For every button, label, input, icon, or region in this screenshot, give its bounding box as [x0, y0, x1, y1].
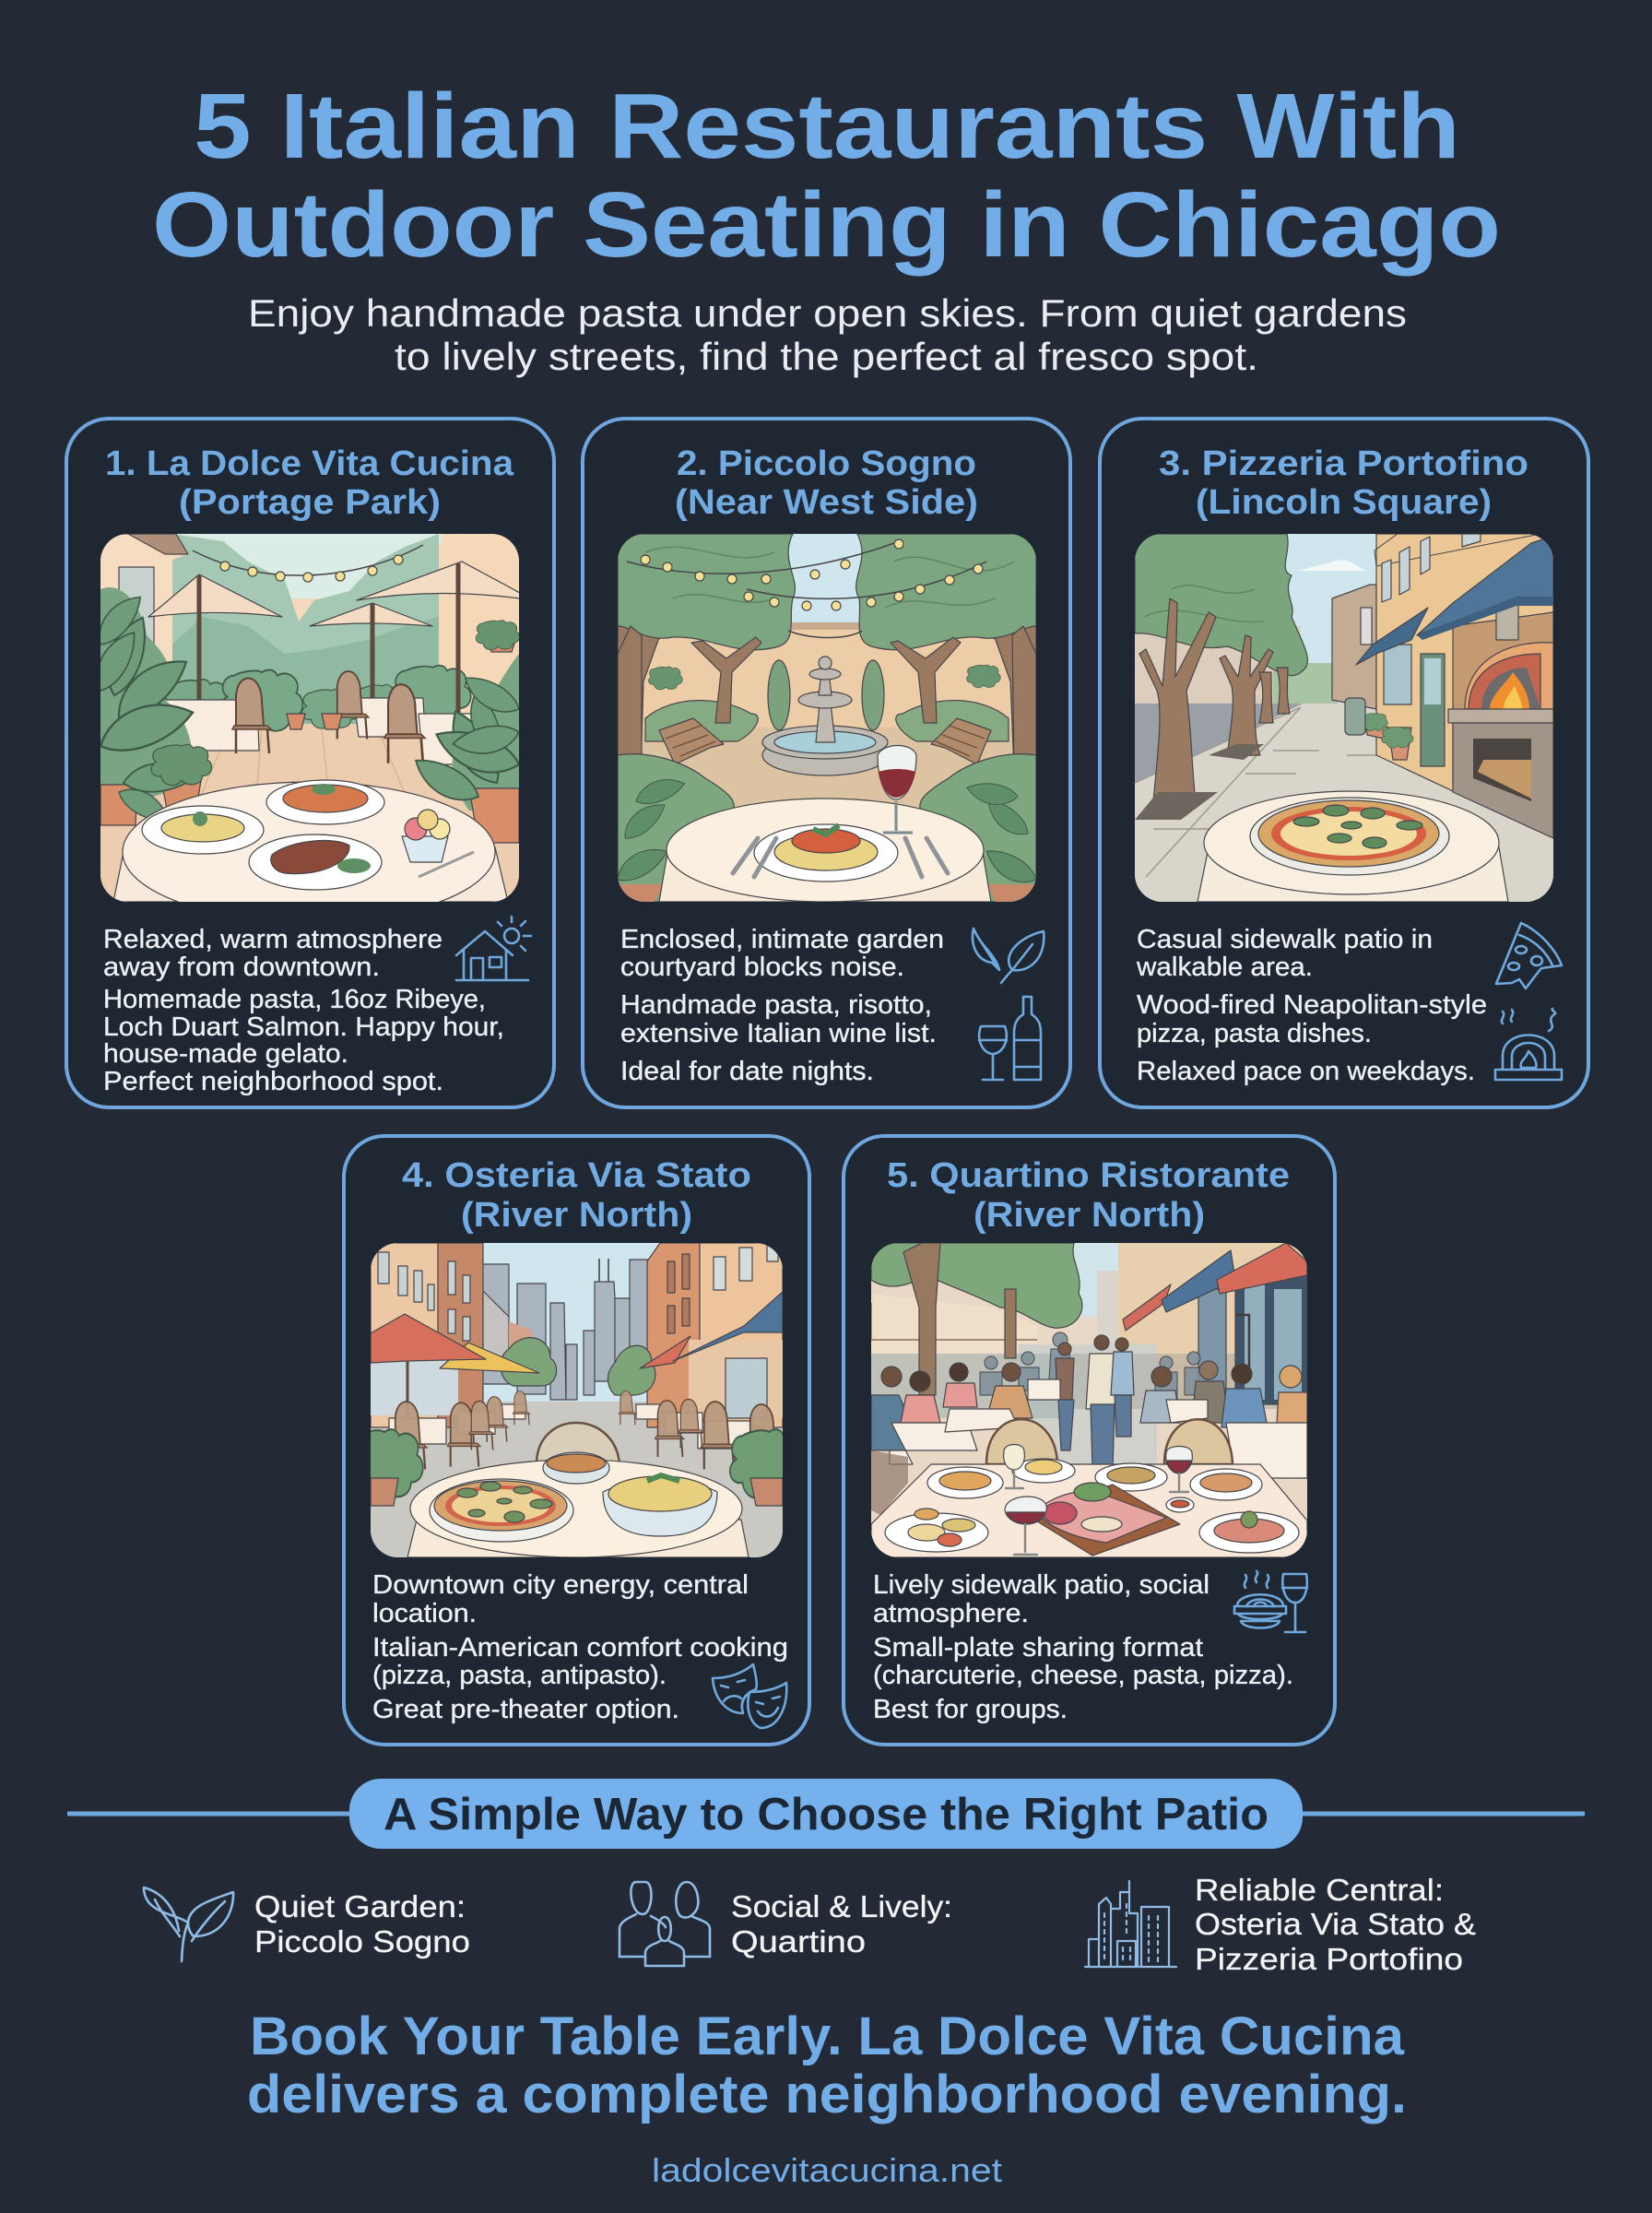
illustration: lively sidewalk patio with sharing plates — [871, 1243, 1307, 1557]
icon: house with sun — [456, 917, 531, 980]
heading: restaurant 5: 5. Quartino Ristorante — [887, 1156, 1290, 1195]
text block: restaurant 4 — [372, 1570, 788, 1724]
text block: restaurant 3: Relaxed pace on weekdays. — [1137, 1057, 1475, 1086]
text block: restaurant 4: Italian-American comfort cooking — [372, 1633, 788, 1663]
title — [152, 75, 1501, 277]
text block: restaurant 5: Small-plate sharing format — [873, 1633, 1203, 1663]
website url: ladolcevitacucina.net — [652, 2151, 1002, 2189]
panel: Pizzeria Portofino — [1100, 419, 1588, 1107]
section header: choose the right patio — [67, 1779, 1585, 1849]
title: Outdoor Seating in Chicago — [152, 173, 1501, 277]
illustration: downtown street with skyline — [371, 1243, 783, 1557]
illustration: garden courtyard with fountain — [611, 534, 1041, 902]
text block: restaurant 5: atmosphere. — [873, 1599, 1029, 1628]
text block: restaurant 3: pizza, pasta dishes. — [1137, 1019, 1372, 1048]
icon: city skyline — [1085, 1881, 1176, 1967]
icon: wine glass and bottle — [979, 997, 1041, 1080]
text block: restaurant 2: courtyard blocks noise. — [620, 953, 904, 982]
heading: restaurant 4: 4. Osteria Via Stato — [402, 1156, 751, 1195]
text block: restaurant 5: Lively sidewalk patio, social — [873, 1570, 1210, 1600]
icon: leaves — [973, 929, 1044, 983]
text block: restaurant 4: (pizza, pasta, antipasto). — [372, 1661, 667, 1690]
text block: restaurant 4: Downtown city energy, central — [372, 1570, 749, 1600]
icon: leaf — [144, 1888, 233, 1961]
text block: restaurant 1: house-made gelato. — [103, 1039, 348, 1069]
text block: restaurant 4: Great pre-theater option. — [372, 1695, 679, 1724]
subtitle: Enjoy handmade pasta under open skies. From quiet gardens — [248, 291, 1407, 335]
text block: restaurant 2: Ideal for date nights. — [620, 1057, 874, 1086]
illustration: garden patio with pasta, steak and gelato — [100, 534, 519, 902]
heading: restaurant 4: (River North) — [461, 1196, 692, 1235]
foreground table with pasta — [659, 799, 991, 902]
legend item: social and lively: Quartino — [731, 1924, 866, 1959]
heading: restaurant 4 — [402, 1156, 751, 1235]
text block: restaurant 3: walkable area. — [1136, 953, 1313, 982]
text block: restaurant 3: Wood-fired Neapolitan-style — [1137, 990, 1487, 1020]
call to action: delivers a complete neighborhood evening. — [247, 2065, 1407, 2124]
panel: La Dolce Vita Cucina — [66, 419, 554, 1107]
section header: choose the right patio: A Simple Way to Choose the Right Patio — [384, 1790, 1268, 1840]
foreground table with pizza and pasta — [407, 1452, 749, 1557]
legend item: reliable central — [1085, 1873, 1476, 1976]
legend item: reliable central: Pizzeria Portofino — [1195, 1942, 1463, 1976]
text block: restaurant 3 — [1136, 925, 1487, 1086]
text block: restaurant 1: Perfect neighborhood spot. — [103, 1067, 443, 1096]
heading: restaurant 5: (River North) — [974, 1196, 1205, 1235]
text block: restaurant 5: Best for groups. — [873, 1695, 1068, 1724]
heading: restaurant 3: (Lincoln Square) — [1196, 483, 1492, 522]
legend item: quiet garden: Piccolo Sogno — [254, 1924, 470, 1959]
illustration: sidewalk with wood-fired oven and pizza — [1135, 534, 1553, 902]
text block: restaurant 2 — [620, 925, 944, 1086]
legend item: quiet garden — [144, 1888, 470, 1961]
text block: restaurant 1: away from downtown. — [103, 953, 380, 982]
foreground table with small plates — [871, 1444, 1307, 1557]
call to action — [247, 2006, 1407, 2124]
legend item: quiet garden: Quiet Garden: — [254, 1889, 466, 1923]
call to action: Book Your Table Early. La Dolce Vita Cucina — [250, 2006, 1405, 2066]
text block: restaurant 1: Relaxed, warm atmosphere — [103, 925, 442, 954]
foreground table with dishes — [113, 779, 507, 902]
heading: restaurant 1: (Portage Park) — [179, 483, 441, 522]
text block: restaurant 2: extensive Italian wine list. — [620, 1019, 937, 1048]
heading: restaurant 2: (Near West Side) — [675, 483, 978, 522]
icon: plate of food and wine glass — [1234, 1571, 1307, 1632]
text block: restaurant 2: Handmade pasta, risotto, — [620, 990, 932, 1020]
icon: group of people — [620, 1882, 710, 1966]
text block: restaurant 4: location. — [372, 1599, 477, 1628]
heading: restaurant 5 — [887, 1156, 1290, 1235]
text block: restaurant 1 — [103, 925, 504, 1096]
diners and pedestrians — [871, 1332, 1307, 1469]
heading: restaurant 3 — [1159, 444, 1528, 522]
panel: Osteria Via Stato — [344, 1136, 809, 1745]
text block: restaurant 5 — [873, 1570, 1293, 1724]
text block: restaurant 3: Casual sidewalk patio in — [1137, 925, 1433, 954]
legend item: reliable central: Osteria Via Stato & — [1195, 1907, 1476, 1941]
foreground table with margherita pizza — [1198, 791, 1508, 902]
panel: Quartino Ristorante — [844, 1136, 1335, 1745]
heading: restaurant 2: 2. Piccolo Sogno — [677, 444, 976, 483]
icon: theater masks — [713, 1664, 786, 1728]
heading: restaurant 2 — [675, 444, 978, 522]
heading: restaurant 1: 1. La Dolce Vita Cucina — [105, 444, 514, 483]
legend item: social and lively: Social & Lively: — [731, 1889, 952, 1923]
panel: Piccolo Sogno — [583, 419, 1070, 1107]
icon: wood-fired oven — [1495, 1009, 1562, 1080]
subtitle — [248, 291, 1407, 378]
icon: pizza slice — [1496, 923, 1562, 988]
text block: restaurant 1: Homemade pasta, 16oz Ribeye, — [103, 985, 486, 1014]
legend item: social and lively — [620, 1882, 952, 1966]
title: 5 Italian Restaurants With — [194, 75, 1460, 178]
legend item: reliable central: Reliable Central: — [1195, 1873, 1444, 1907]
text block: restaurant 5: (charcuterie, cheese, pasta, pizza). — [873, 1661, 1293, 1690]
text block: restaurant 1: Loch Duart Salmon. Happy hour, — [103, 1012, 504, 1042]
subtitle: to lively streets, find the perfect al fresco spot. — [395, 335, 1258, 378]
heading: restaurant 3: 3. Pizzeria Portofino — [1159, 444, 1528, 483]
text block: restaurant 2: Enclosed, intimate garden — [620, 925, 944, 954]
heading: restaurant 1 — [105, 444, 514, 522]
